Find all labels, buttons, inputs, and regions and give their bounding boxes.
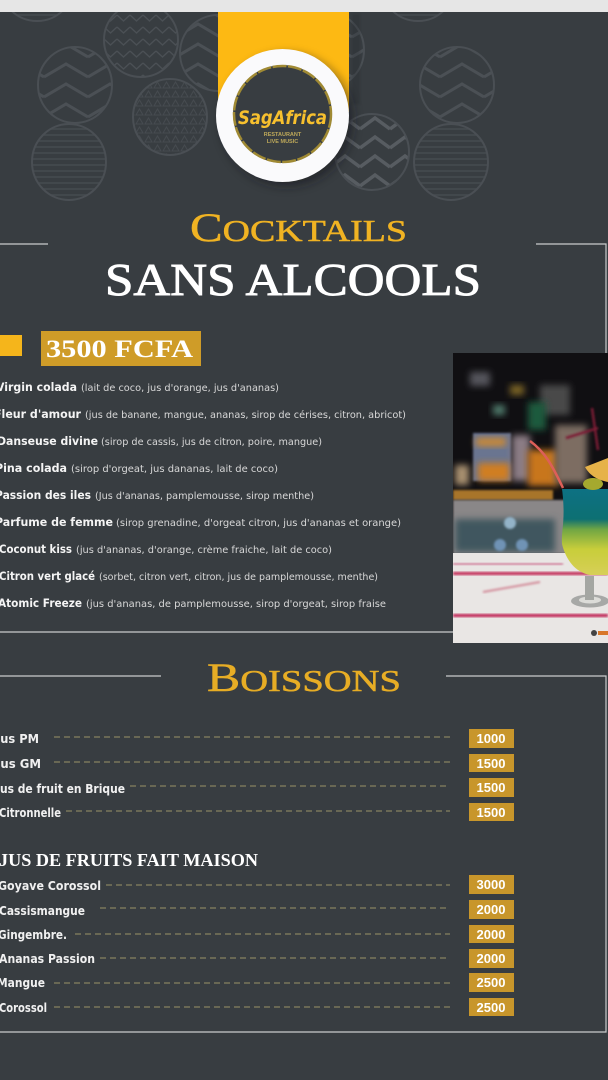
item: Jus GM: 1500: [477, 756, 505, 771]
item: Goyave Corossol: [0, 875, 514, 894]
cocktail list: (sirop d'orgeat, jus dananas, lait de coco): [71, 464, 278, 475]
item: Cassismangue: [0, 900, 514, 919]
item: Ananas Passion: 2000: [477, 951, 505, 966]
frame lines: boissons section: [0, 676, 606, 1032]
cocktail list: (lait de coco, jus d'orange, jus d'ananas): [81, 383, 279, 394]
item: Citronnelle: Citronnelle: [0, 805, 61, 820]
price tag: 3500 FCFA: 3500 FCFA: [46, 336, 193, 363]
item: Cassismangue: 2000: [477, 902, 505, 917]
item: Citronnelle: 1500: [477, 805, 505, 820]
cocktail list: (sirop grenadine, d'orgeat citron, jus d'ananas et orange): [116, 518, 401, 529]
item: Jus de fruit en Brique: Jus de fruit en Brique: [0, 781, 125, 796]
cocktail list: Danseuse divine: [0, 434, 98, 448]
item: Ananas Passion: Ananas Passion: [0, 951, 95, 966]
drinks list: [0, 729, 514, 1016]
cocktail list: (jus de banane, mangue, ananas, sirop de cérises, citron, abricot): [85, 409, 406, 421]
item: Ananas Passion: [0, 949, 514, 968]
cocktail list: (jus d'ananas, d'orange, crème fraiche, lait de coco): [76, 544, 332, 556]
title: sans alcools: SANS ALCOOLS: [105, 254, 481, 305]
logo badge: [216, 49, 353, 186]
top light bar: [0, 0, 608, 12]
yellow ribbon: [218, 12, 360, 112]
item: Mangue: 2500: [477, 975, 505, 990]
cocktail list: (Jus d'ananas, pamplemousse, sirop menthe): [95, 491, 314, 502]
item: Goyave Corossol: Goyave Corossol: [0, 878, 101, 893]
item: Corossol: Corossol: [0, 1000, 47, 1015]
small gold marker: [0, 335, 22, 356]
decorative patterned circles: [0, 0, 494, 200]
item: Jus PM: [0, 729, 514, 748]
heading: jus de fruits fait maison: JUS DE FRUITS FAIT MAISON: [0, 850, 258, 870]
cocktail list: (jus d'ananas, de pamplemousse, sirop d'orgeat, sirop fraise: [86, 599, 386, 610]
item: Corossol: 2500: [477, 1000, 505, 1015]
frame lines: cocktails section: [0, 244, 606, 632]
logo badge: LIVE MUSIC: [267, 139, 298, 145]
item: Gingembre: Gingembre.: [0, 927, 67, 942]
cocktail list: Citron vert glacé: [0, 569, 95, 583]
item: Citronnelle: [0, 803, 514, 821]
cocktail list: [0, 380, 406, 610]
item: Jus PM: 1000: [477, 731, 505, 746]
item: Cassismangue: Cassismangue: [0, 903, 85, 918]
item: Jus de fruit en Brique: [0, 778, 514, 797]
cocktail list: Coconut kiss: [0, 542, 72, 556]
logo badge: SagAfrica: [238, 107, 327, 129]
item: Corossol: [0, 998, 514, 1016]
price tag: 3500 FCFA: [41, 331, 201, 366]
cocktail list: (sirop de cassis, jus de citron, poire, mangue): [101, 437, 322, 448]
cocktail list: Atomic Freeze: [0, 596, 82, 610]
item: Jus de fruit en Brique: 1500: [477, 780, 505, 795]
cocktail list: (sorbet, citron vert, citron, jus de pamplemousse, menthe): [99, 572, 378, 583]
title: cocktails: COCKTAILS: [190, 205, 407, 250]
logo badge: RESTAURANT: [264, 132, 302, 138]
item: Goyave Corossol: 3000: [477, 877, 505, 892]
title: boissons: BOISSONS: [207, 655, 401, 700]
item: Jus GM: [0, 754, 514, 772]
item: Mangue: [0, 973, 514, 992]
item: Gingembre: [0, 925, 514, 943]
item: Gingembre: 2000: [477, 927, 505, 942]
cocktail photo: [453, 353, 608, 643]
